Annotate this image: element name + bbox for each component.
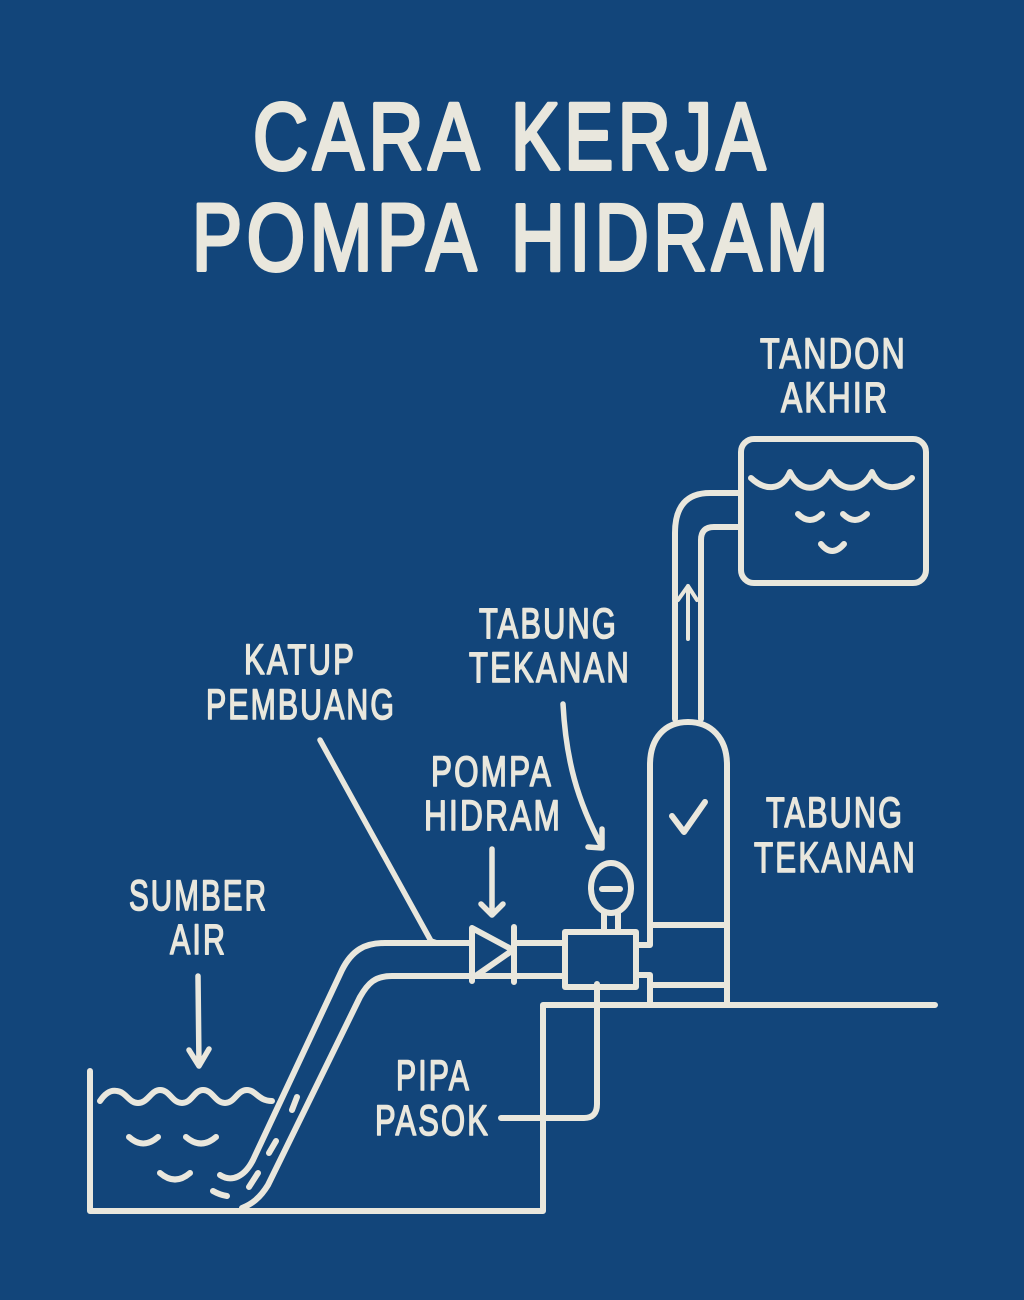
label: tabung tekanan top: TEKANAN (469, 644, 631, 692)
reservoir wave (751, 472, 912, 488)
arrow: tabung tekanan curved (563, 704, 602, 848)
label: sumber air: SUMBER (129, 872, 268, 920)
pump body (565, 932, 636, 987)
label: sumber air (129, 872, 268, 964)
arrow: katup pembuang leader (320, 740, 437, 943)
title (192, 84, 833, 291)
title: KERJA (511, 84, 770, 190)
water ripples (129, 1137, 216, 1180)
label: tandon akhir: TANDON (760, 330, 907, 378)
label: katup pembuang (206, 636, 396, 729)
label: tabung tekanan top (469, 600, 631, 692)
label: pompa hidram: POMPA (431, 748, 553, 796)
arrow: pompa hidram (481, 849, 503, 915)
label: sumber air: AIR (170, 916, 227, 964)
label: pipa pasok (375, 1052, 490, 1145)
flow dashes (213, 1097, 297, 1196)
checkmark (672, 802, 705, 832)
water surface wave (100, 1090, 272, 1103)
valve (472, 927, 565, 982)
label: pompa hidram (424, 748, 562, 840)
label: pipa pasok: PIPA (396, 1052, 471, 1100)
label: katup pembuang: PEMBUANG (206, 681, 396, 729)
water source (100, 1090, 272, 1180)
riser pipe (675, 493, 740, 719)
reservoir ripples (798, 514, 867, 551)
label: tandon akhir (760, 330, 907, 422)
label: tandon akhir: AKHIR (781, 374, 889, 422)
ground and source basin outline (90, 1005, 935, 1211)
label: katup pembuang: KATUP (244, 636, 356, 684)
title: CARA (253, 84, 484, 190)
pressure tank (636, 722, 727, 1005)
label: pipa pasok: PASOK (375, 1097, 490, 1145)
label: tabung tekanan right: TABUNG (766, 789, 904, 837)
label: tabung tekanan top: TABUNG (479, 600, 618, 648)
label: tabung tekanan right (754, 789, 917, 882)
final reservoir (741, 439, 926, 583)
arrow: sumber air (189, 976, 209, 1066)
label: pompa hidram: HIDRAM (424, 792, 562, 840)
supply pipe (213, 943, 565, 1208)
up arrow (678, 586, 697, 639)
label: tabung tekanan right: TEKANAN (754, 834, 917, 882)
title: POMPA (192, 185, 481, 291)
title: HIDRAM (511, 185, 833, 291)
pressure gauge (591, 863, 631, 932)
supply pipe to pump (501, 984, 597, 1118)
